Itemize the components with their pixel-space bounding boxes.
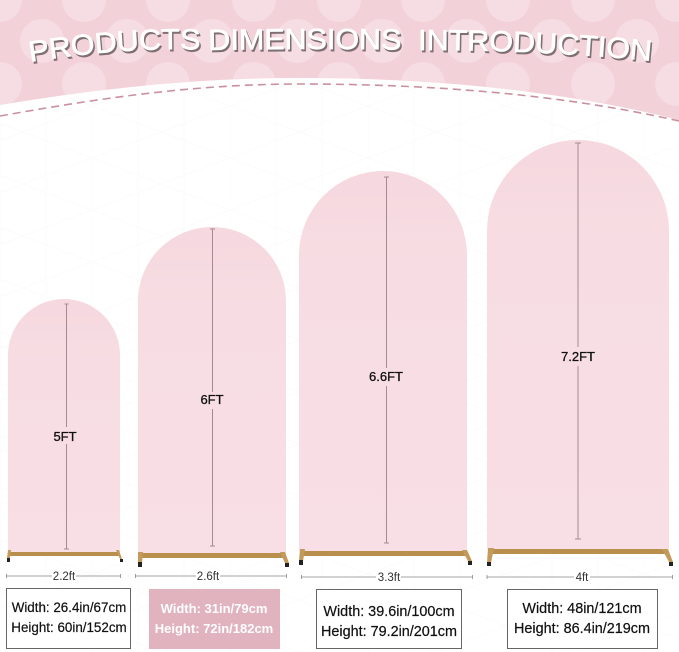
width measure 2.6ft <box>136 571 286 583</box>
width measure 2.2ft <box>6 571 120 583</box>
height line <box>210 229 215 546</box>
width measure 3.3ft: 3.3ft <box>378 572 401 584</box>
arch 2: 6ft <box>138 227 289 567</box>
stand <box>7 550 123 562</box>
size box 3 <box>316 590 462 648</box>
size box 3: Width: 39.6in/100cm <box>323 604 455 620</box>
height label: 6.6FT <box>369 369 403 384</box>
title: PRODUCTS DIMENSIONS INTRODUCTION <box>29 28 651 62</box>
size box 1: Height: 60in/152cm <box>11 620 127 635</box>
width measure 2.2ft: 2.2ft <box>53 571 76 583</box>
size box 2 highlighted: Height: 72in/182cm <box>155 621 273 636</box>
size box 4 <box>508 590 658 648</box>
height label: 6FT <box>200 392 224 407</box>
arch 4: 7.2ft <box>487 140 673 566</box>
size box 3: Height: 79.2in/201cm <box>321 624 457 640</box>
size box 4: Width: 48in/121cm <box>522 601 642 617</box>
dashed curve <box>0 84 679 121</box>
stand <box>138 552 289 567</box>
width measure 2.6ft: 2.6ft <box>197 571 220 583</box>
size box 1 <box>6 588 130 648</box>
stand <box>487 548 673 566</box>
width measure 4ft: 4ft <box>576 572 589 584</box>
arch 3: 6.6ft <box>299 171 472 565</box>
height line <box>575 143 581 539</box>
width measure 4ft <box>487 572 672 584</box>
height line <box>64 304 69 549</box>
height label: 5FT <box>53 429 77 444</box>
arch 1: 5ft <box>7 299 123 562</box>
title: PRODUCTS DIMENSIONS INTRODUCTION <box>33 30 652 64</box>
size box 2 highlighted: Width: 31in/79cm <box>161 601 267 616</box>
size box 2 highlighted <box>149 589 280 649</box>
height label: 7.2FT <box>561 349 595 364</box>
width measure 3.3ft <box>302 572 472 584</box>
size box 4: Height: 86.4in/219cm <box>514 621 650 637</box>
stand <box>299 549 472 565</box>
size box 1: Width: 26.4in/67cm <box>12 600 126 615</box>
height line <box>384 177 389 543</box>
header band with polka dots <box>0 0 679 125</box>
